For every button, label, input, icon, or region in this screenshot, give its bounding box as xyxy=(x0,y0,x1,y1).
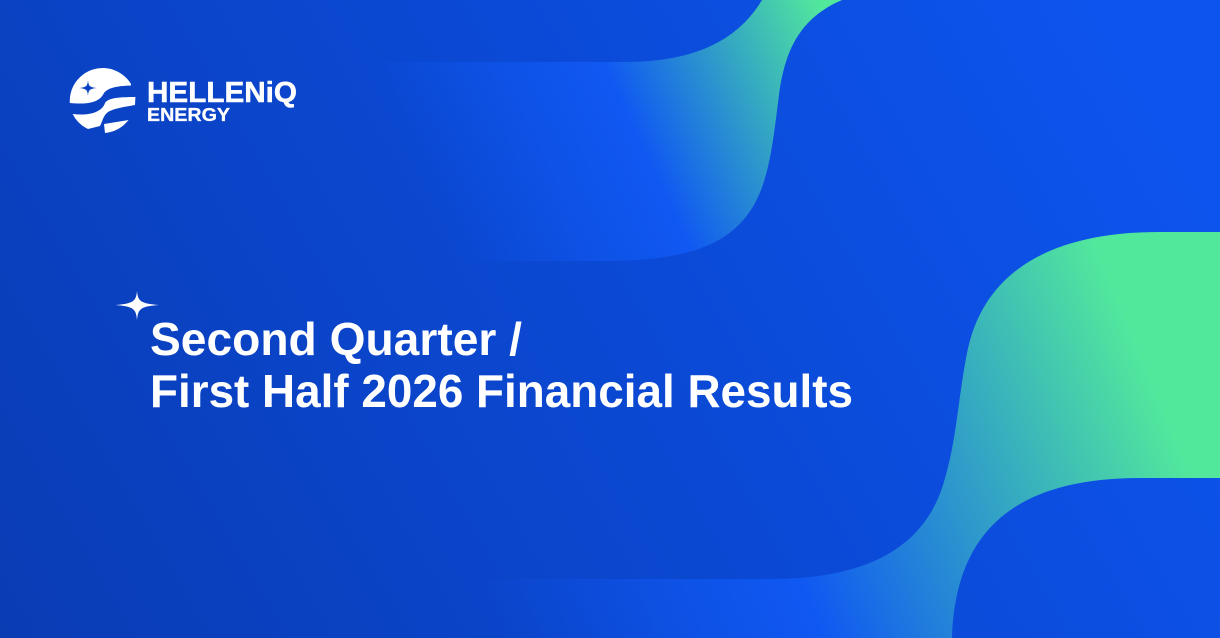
logo wordmark: HELLENiQ xyxy=(147,77,297,109)
logo: Helleniq Energy xyxy=(70,68,297,133)
title xyxy=(150,313,853,417)
title line 2: First Half 2026 Financial Results xyxy=(150,365,853,417)
logo subtitle: ENERGY xyxy=(147,105,230,125)
icon: sparkle star xyxy=(115,291,159,320)
title line 1: Second Quarter / xyxy=(150,313,522,365)
logo emblem xyxy=(70,68,135,133)
wave band: bottom right xyxy=(480,232,1220,638)
wave band: top xyxy=(300,0,842,261)
